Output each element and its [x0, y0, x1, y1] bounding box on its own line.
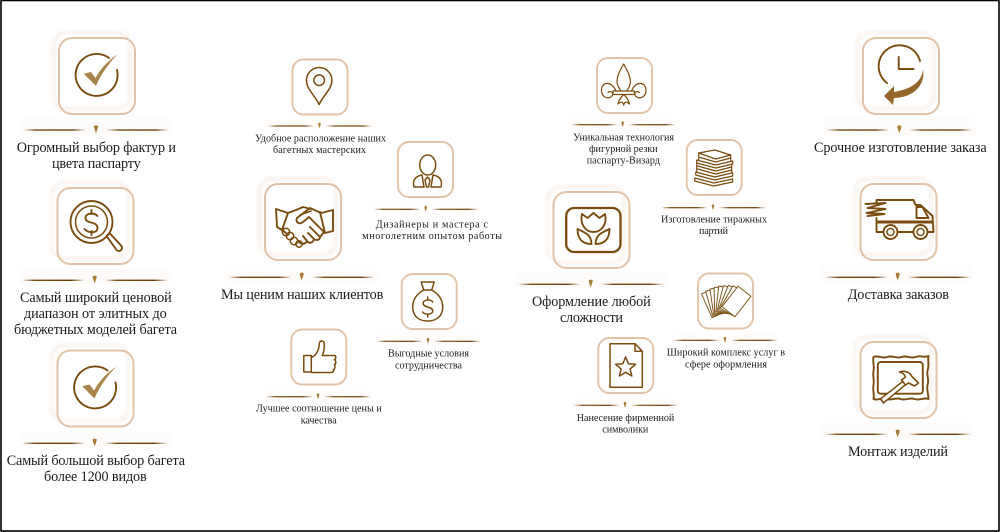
panel: any complexity: [515, 186, 667, 326]
text: [573, 132, 674, 167]
divider: [19, 268, 171, 285]
text: Огромный выбор фактур и: [17, 140, 176, 156]
divider: [264, 389, 372, 401]
divider: [822, 265, 974, 282]
text: фигурной резки: [589, 144, 658, 155]
divider: [659, 200, 767, 212]
panel: range of services: [667, 274, 785, 371]
text: [7, 453, 186, 485]
divider: [374, 333, 482, 345]
icon: magnifier with dollar: [52, 182, 134, 264]
icon: fleur de lis: [597, 58, 652, 113]
panel: brand symbols: [571, 338, 679, 436]
text: Срочное изготовление заказа: [814, 140, 987, 156]
text: партий: [699, 226, 729, 237]
text: Лучшее соотношение цены и: [256, 404, 382, 415]
text: багетных мастерских: [273, 145, 366, 156]
divider: [823, 118, 975, 135]
text: [17, 140, 176, 172]
panel: print runs: [659, 140, 767, 237]
text: Самый широкий ценовой: [20, 290, 172, 306]
divider: [671, 332, 779, 344]
text: Дизайнеры и мастера с: [376, 220, 489, 231]
text: [532, 294, 651, 326]
text: Широкий комплекс услуг в: [667, 347, 785, 358]
icon: check mark card: [52, 345, 134, 426]
panel: texture choice: [17, 32, 176, 172]
text: [661, 215, 767, 237]
text: цвета паспарту: [52, 156, 142, 172]
icon: tulip: [548, 186, 630, 268]
text: [667, 347, 785, 371]
text: паспарту-Визард: [587, 156, 660, 167]
divider: [822, 422, 974, 439]
divider: [515, 272, 667, 289]
text: Изготовление тиражных: [661, 215, 767, 226]
panel: location: [255, 60, 386, 156]
text: [255, 134, 386, 156]
divider: [226, 265, 378, 282]
divider: [20, 118, 172, 135]
icon: frame and hammer: [855, 336, 936, 418]
panel: designers: [362, 142, 502, 242]
text: Выгодные условия: [388, 349, 469, 360]
text: [362, 220, 502, 242]
divider: [569, 117, 677, 129]
panel: we value clients: [221, 178, 384, 303]
text: [388, 349, 469, 372]
text: сотрудничества: [395, 361, 463, 372]
divider: [571, 397, 679, 409]
icon: document with star: [598, 338, 653, 393]
icon: thumbs up: [291, 330, 346, 384]
text: Нанесение фирменной: [577, 413, 675, 424]
panel: delivery: [822, 178, 974, 303]
text: Самый большой выбор багета: [7, 453, 186, 469]
text: диапазон от элитных до: [24, 306, 167, 322]
text: [14, 290, 178, 338]
divider: [266, 118, 374, 130]
icon: clock with arrow: [858, 32, 939, 114]
icon: card fan: [698, 274, 753, 328]
text: Оформление любой: [532, 294, 651, 310]
text: Уникальная технология: [573, 132, 674, 143]
icon: person: [398, 142, 453, 197]
text: качества: [301, 416, 337, 427]
panel: best price: [256, 330, 382, 427]
divider: [19, 431, 171, 448]
icon: delivery truck: [855, 178, 936, 260]
text: более 1200 видов: [44, 469, 147, 485]
panel: urgent orders: [814, 32, 987, 156]
text: сложности: [560, 310, 623, 326]
text: Мы ценим наших клиентов: [221, 287, 384, 303]
text: сфере оформления: [685, 360, 767, 371]
panel: wizard cutting: [569, 58, 677, 167]
panel: largest baguette selection: [7, 345, 186, 485]
icon: paper stack: [687, 140, 742, 195]
icon: handshake: [260, 178, 341, 260]
text: Удобное расположение наших: [255, 134, 386, 145]
icon: money bag: [402, 274, 457, 329]
panel: favorable terms: [374, 274, 482, 372]
text: Доставка заказов: [848, 287, 949, 303]
icon: map pin: [292, 60, 348, 114]
icon: check mark card: [54, 32, 135, 114]
panel: price range: [14, 182, 178, 338]
text: [256, 404, 382, 427]
text: [577, 413, 675, 436]
text: многолетним опытом работы: [362, 231, 502, 242]
divider: [372, 201, 480, 213]
text: символики: [602, 425, 649, 436]
text: Монтаж изделий: [848, 444, 948, 460]
panel: installation: [822, 336, 974, 460]
text: бюджетных моделей багета: [14, 322, 178, 338]
